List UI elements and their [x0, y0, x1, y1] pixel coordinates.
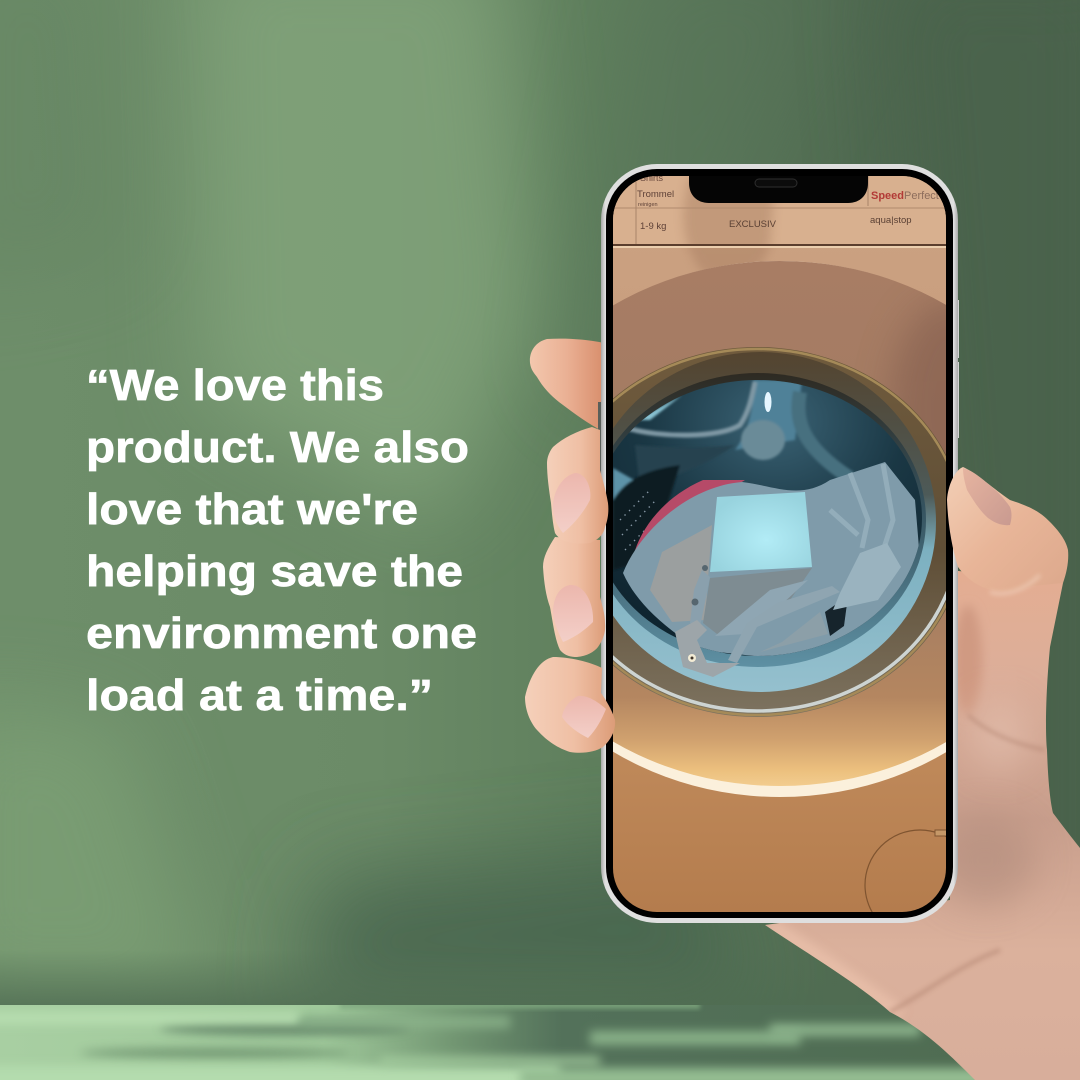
nail: ring finger — [553, 585, 593, 642]
grey shirt — [650, 525, 712, 622]
ring finger — [543, 537, 605, 657]
testimonial quote: love that we're — [86, 485, 418, 534]
machine control panel: Shirts — [640, 173, 664, 183]
door pale seal line — [613, 590, 946, 713]
machine control panel: 1-9 kg — [640, 221, 666, 232]
drum interior — [594, 380, 922, 656]
testimonial quote — [86, 361, 477, 720]
machine door recess — [613, 261, 946, 797]
testimonial quote: environment one — [86, 609, 477, 658]
perforated drum wall — [620, 492, 655, 550]
machine control panel — [613, 176, 946, 270]
finger: little finger over phone — [525, 657, 615, 753]
lower door panel — [864, 829, 946, 912]
shirt collar with buttons — [675, 565, 840, 677]
nail: little finger — [562, 696, 606, 738]
phone speaker — [755, 179, 797, 187]
testimonial quote: helping save the — [86, 547, 463, 596]
clothes mass — [623, 462, 920, 660]
phone notch — [689, 176, 868, 203]
testimonial quote: product. We also — [86, 423, 469, 472]
machine control panel: aqua|stop — [870, 215, 912, 226]
centre fabric — [703, 568, 812, 634]
floor with light bands — [0, 1005, 975, 1080]
fingers: middle and ring over phone — [543, 427, 608, 657]
nail: middle finger — [553, 473, 590, 533]
drum metal highlights — [613, 380, 850, 570]
nail: thumb — [963, 468, 1012, 525]
door outer ring — [613, 347, 946, 717]
drum contents — [613, 380, 920, 660]
machine control panel: reinigen — [638, 202, 658, 208]
paper sheet in drum — [710, 492, 812, 572]
phone bezel — [606, 169, 953, 918]
testimonial quote: “We love this — [86, 361, 384, 410]
middle finger — [547, 427, 608, 544]
door inner ring — [584, 352, 936, 692]
phone screen: washing machine photo — [613, 176, 946, 912]
machine control panel: SpeedPerfect — [871, 190, 939, 202]
thumb knuckle crease — [990, 575, 1040, 594]
hand: palm and wrist behind phone — [760, 560, 1080, 1080]
finger: index behind phone — [530, 339, 604, 432]
specular spot — [764, 392, 772, 412]
machine control panel: EXCLUSIV — [729, 219, 777, 230]
testimonial quote: load at a time.” — [86, 671, 433, 720]
phone — [598, 164, 959, 923]
phone frame — [601, 164, 958, 923]
machine control panel: Trommel — [637, 189, 674, 200]
red shirt — [634, 480, 745, 551]
phone side buttons — [598, 300, 959, 474]
thumb over phone — [947, 467, 1068, 594]
right clothes pile — [830, 464, 893, 560]
